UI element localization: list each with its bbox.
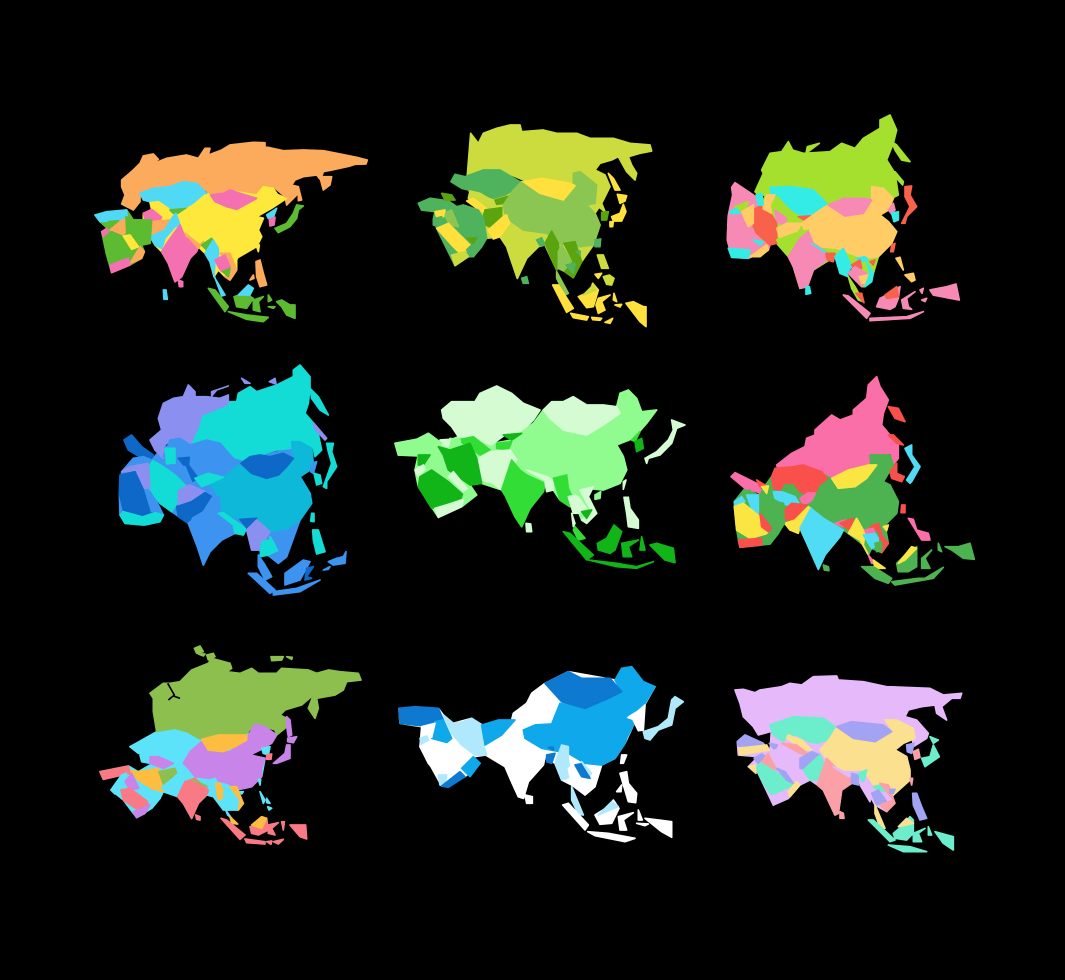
map 9: Asia in lilac, aqua, periwinkle, yellow and pink pastels — [735, 676, 962, 852]
map 8: Asia in white and blue tones — [399, 667, 683, 842]
India region — [788, 232, 828, 288]
map 4: Asia in turquoise, blue and lavender — [119, 365, 346, 595]
Indonesia islands — [208, 288, 228, 312]
mainland underlay — [100, 732, 277, 818]
mainland underlay — [399, 672, 655, 798]
Japan — [645, 420, 685, 463]
Japan — [902, 186, 917, 223]
India region — [800, 508, 843, 569]
Russia region — [735, 676, 962, 747]
China region — [210, 442, 313, 532]
Russia and central region in white — [482, 683, 560, 798]
map 7: Asia in olive green, cyan, purple, orange and salmon — [100, 646, 361, 844]
mainland underlay — [148, 445, 313, 565]
Russia region — [755, 115, 898, 203]
China region — [512, 390, 657, 490]
China region — [812, 455, 898, 530]
China region — [503, 172, 600, 247]
Arabia region — [121, 788, 150, 810]
India region — [162, 225, 198, 282]
India region — [817, 758, 852, 815]
China region — [523, 667, 655, 765]
Indonesia islands — [563, 803, 588, 830]
Indonesia islands — [843, 295, 870, 318]
China region — [802, 187, 897, 258]
Arabia region — [119, 472, 153, 516]
mainland underlay — [143, 188, 287, 282]
Arabia region — [727, 215, 758, 250]
India region — [502, 460, 545, 527]
mainland underlay — [395, 423, 633, 527]
mainland underlay — [737, 718, 913, 815]
Japan — [287, 717, 292, 737]
China region — [183, 724, 277, 790]
Arabia region — [734, 503, 768, 538]
India region — [178, 778, 208, 818]
China region — [178, 187, 287, 253]
mainland underlay — [762, 185, 897, 288]
Indonesia islands — [868, 820, 895, 842]
map 2: Asia in lime, green and yellow — [418, 125, 652, 327]
Russia region — [777, 377, 898, 477]
Russia region — [467, 125, 652, 212]
India region — [188, 496, 235, 565]
Indonesia islands — [221, 818, 245, 839]
Arabia region — [437, 223, 473, 253]
Russia and Kazakhstan region — [442, 386, 540, 445]
Russia region — [150, 658, 361, 739]
mainland underlay — [468, 182, 602, 278]
map 5: Asia in pale, light and dark green — [395, 386, 685, 568]
Indonesia islands — [862, 567, 892, 583]
Arabia region — [103, 232, 135, 262]
map 6: Asia in pink, red, yellow, green and cyan — [731, 377, 974, 585]
Indonesia islands — [563, 532, 593, 560]
map 3: Asia in lime, cyan, pink, orange and red — [727, 115, 959, 321]
Russia region — [122, 142, 367, 210]
Indonesia islands — [258, 555, 272, 580]
Russia west region — [150, 385, 228, 458]
China region — [820, 720, 915, 795]
Arabia region — [755, 763, 793, 795]
mainland underlay — [734, 463, 898, 569]
Turkey — [399, 707, 443, 726]
map 1: Asia in orange, yellow, pink, cyan and green — [95, 142, 367, 322]
Indonesia islands — [553, 285, 573, 312]
Arabia region — [418, 470, 465, 508]
Russia east region — [190, 365, 322, 460]
Japan islands — [608, 173, 620, 190]
Arabia region — [420, 740, 468, 775]
